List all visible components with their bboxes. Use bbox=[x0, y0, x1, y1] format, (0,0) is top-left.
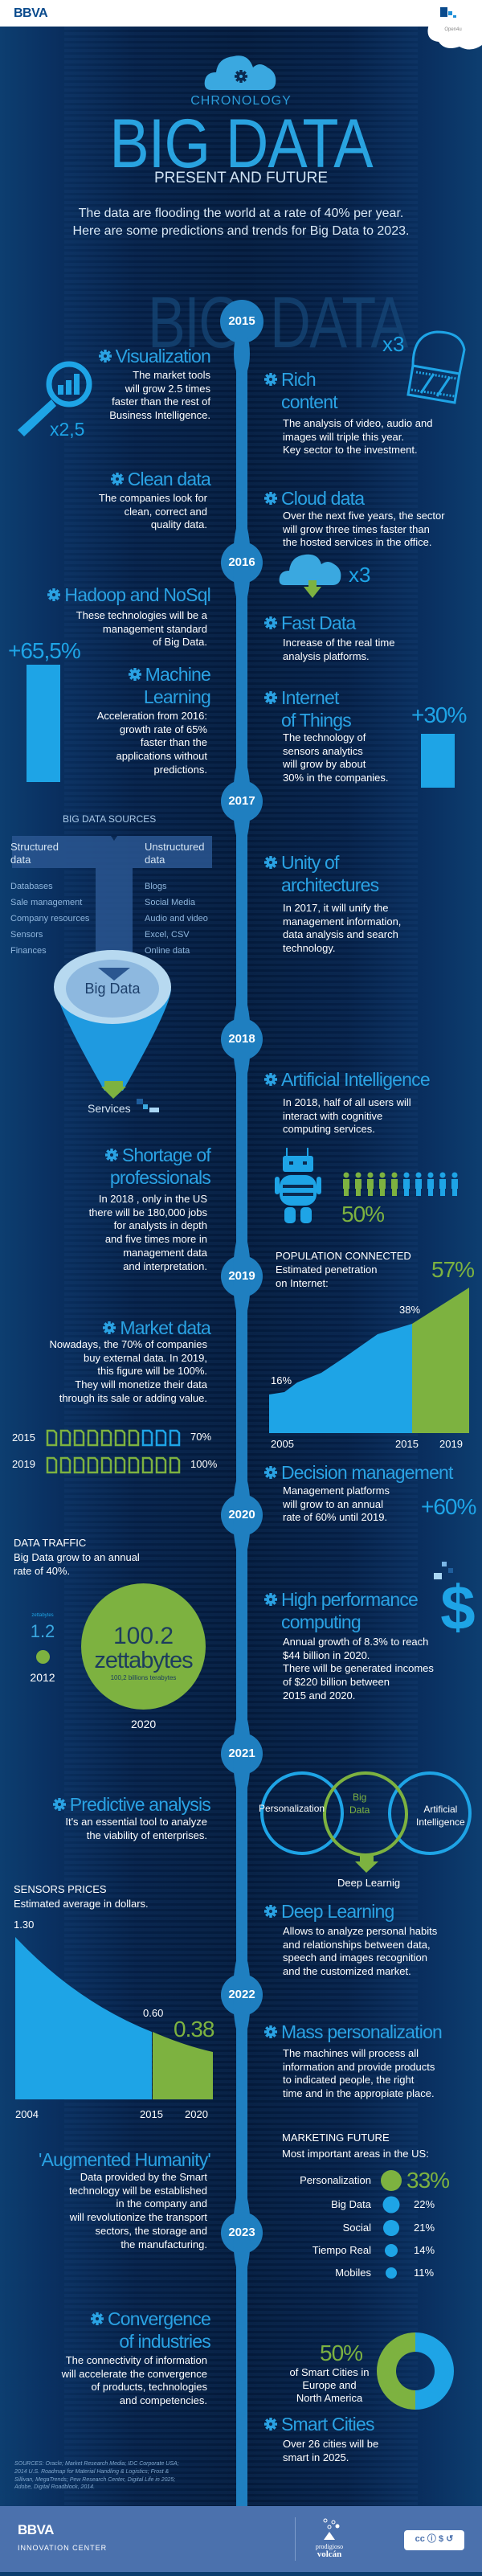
heading bbox=[263, 1588, 418, 1633]
heading: Shortage of bbox=[122, 1145, 210, 1165]
panel: predictive analysis bbox=[32, 1792, 214, 1842]
heading bbox=[90, 2308, 210, 2353]
venn diagram: personalization, big data, AI: Artificial bbox=[423, 1804, 457, 1815]
panel: cloud data bbox=[264, 488, 445, 548]
heading: DATA TRAFFIC bbox=[14, 1537, 86, 1549]
text: $44 billion in 2020. bbox=[283, 1649, 370, 1661]
list: structured: Sale management bbox=[10, 898, 82, 907]
text: quality data. bbox=[151, 518, 207, 530]
panel: fast data bbox=[264, 612, 394, 662]
text: The companies look for bbox=[99, 492, 207, 504]
year: 2015: 2015 bbox=[228, 314, 255, 328]
text: there will be 180,000 jobs bbox=[89, 1206, 207, 1218]
heading: Market data bbox=[120, 1317, 210, 1338]
text bbox=[62, 2354, 207, 2408]
bubble: 2012: 2012 bbox=[30, 1671, 55, 1684]
heading: Estimated penetration bbox=[276, 1263, 377, 1276]
text: will grow to an annual bbox=[283, 1498, 383, 1510]
text: buy external data. In 2019, bbox=[84, 1352, 207, 1364]
panel: deep learning bbox=[263, 1900, 472, 1979]
year: 2023: 2023 bbox=[228, 2226, 255, 2239]
heading: Artificial Intelligence bbox=[281, 1069, 430, 1090]
labels: 38% bbox=[399, 1304, 420, 1316]
bubble list bbox=[273, 2128, 458, 2283]
text bbox=[283, 2438, 378, 2464]
sources: Adobe, Digital Roadblock, 2014. bbox=[14, 2484, 95, 2490]
panel: smart cities bbox=[263, 2413, 424, 2466]
heading: Machine bbox=[145, 664, 210, 685]
text: management information, bbox=[283, 915, 401, 928]
text: applications without bbox=[116, 750, 207, 762]
text bbox=[283, 731, 389, 784]
year: 2020: 2020 bbox=[228, 1508, 255, 1521]
text: sectors, the storage and bbox=[96, 2225, 207, 2237]
text bbox=[96, 710, 207, 776]
icon: magnifier x2,5 bbox=[18, 362, 92, 440]
column: unstructured bbox=[145, 841, 204, 866]
footer logo: BBVA innovation center: BBVA bbox=[18, 2522, 54, 2537]
bar: +30% bbox=[411, 702, 466, 788]
intro text bbox=[73, 207, 409, 238]
donut: smart cities 50% bbox=[305, 2331, 458, 2411]
panel: augmented humanity bbox=[16, 2148, 214, 2254]
text: and relationships between data, bbox=[283, 1939, 431, 1951]
panel: mass personalization bbox=[263, 2021, 472, 2101]
panel: sensors prices chart: 0.38 bbox=[174, 2017, 214, 2042]
heading bbox=[264, 369, 337, 412]
bubble: 2020: zettabytes bbox=[94, 1648, 193, 1673]
panel: population connected chart: 2019 bbox=[439, 1438, 463, 1450]
heading: Fast Data bbox=[281, 612, 356, 633]
intro text: Here are some predictions and trends for Big Data to 2023. bbox=[73, 224, 409, 238]
heading: POPULATION CONNECTED bbox=[276, 1250, 411, 1262]
footer logo: creative commons: cc ⓘ $ ↺ bbox=[415, 2534, 453, 2544]
text: clean, correct and bbox=[125, 506, 207, 518]
year: 2019: 2019 bbox=[228, 1269, 255, 1283]
icon: cloud download x3 bbox=[280, 555, 370, 598]
text: Over the next five years, the sector bbox=[283, 510, 445, 522]
panel: big data sources funnel bbox=[10, 813, 212, 1115]
text: The connectivity of information bbox=[66, 2354, 207, 2366]
text: in the company and bbox=[116, 2197, 207, 2209]
text bbox=[65, 1816, 207, 1842]
panel: marketing future: 14% bbox=[414, 2244, 435, 2256]
heading: Estimated average in dollars. bbox=[14, 1898, 149, 1910]
text: Annual growth of 8.3% to reach bbox=[283, 1636, 428, 1648]
venn diagram: personalization, big data, AI: Intelligence bbox=[416, 1816, 465, 1828]
text bbox=[89, 1193, 207, 1273]
footer logo: prodigioso volcan: volcán bbox=[317, 2549, 341, 2559]
text: Key sector to the investment. bbox=[283, 444, 418, 456]
panel: sensors prices chart: 2015 bbox=[140, 2108, 163, 2120]
logo: Open4u cloud: Open4u bbox=[444, 27, 462, 32]
icon: cloud with gear bbox=[204, 55, 276, 90]
text: computing services. bbox=[283, 1123, 375, 1135]
heading: architectures bbox=[281, 874, 378, 895]
footer bbox=[0, 2506, 482, 2572]
text: The machines will process all bbox=[283, 2047, 419, 2059]
text bbox=[283, 1485, 390, 1525]
list: unstructured: Blogs bbox=[145, 882, 167, 891]
text: rate of 60% until 2019. bbox=[283, 1511, 387, 1523]
venn diagram: personalization, big data, AI: Data bbox=[349, 1804, 370, 1816]
text: the viability of enterprises. bbox=[87, 1829, 207, 1841]
text: technology. bbox=[283, 942, 336, 954]
text: will grow three times faster than bbox=[283, 523, 430, 535]
heading: Deep Learning bbox=[281, 1901, 394, 1922]
panel: marketing future: 33% bbox=[406, 2168, 449, 2193]
panel: population connected chart: 16% bbox=[271, 1374, 292, 1386]
heading: Big Data grow to an annual bbox=[14, 1551, 140, 1562]
text: technology will be established bbox=[69, 2185, 207, 2197]
panel: shortage of professionals bbox=[64, 1143, 214, 1273]
text: In 2017, it will unify the bbox=[283, 902, 389, 914]
icon chart: documents 70% / 100%: 70% bbox=[190, 1431, 211, 1443]
heading: professionals bbox=[110, 1167, 210, 1188]
heading: Clean data bbox=[128, 469, 210, 489]
column: structured: Structured bbox=[10, 841, 59, 853]
heading: Internet bbox=[281, 687, 339, 708]
panel: convergence of industries bbox=[56, 2307, 214, 2407]
icon: cloud download x3: x3 bbox=[349, 563, 370, 587]
footer logo: creative commons bbox=[404, 2530, 464, 2550]
panel: sensors prices chart: 2020 bbox=[185, 2108, 208, 2120]
text bbox=[283, 417, 432, 456]
venn diagram: personalization, big data, AI: Personalization bbox=[259, 1803, 325, 1814]
panel: sensors prices chart: 1.30 bbox=[14, 1919, 34, 1931]
text bbox=[283, 2047, 435, 2101]
heading: of industries bbox=[119, 2331, 210, 2352]
text: information and provide products bbox=[283, 2061, 435, 2073]
panel: artificial intelligence bbox=[263, 1068, 472, 1136]
footer logo: prodigioso volcan bbox=[305, 2516, 353, 2564]
text: and interpretation. bbox=[123, 1260, 207, 1272]
header bar bbox=[0, 0, 482, 27]
panel: high performance computing bbox=[263, 1559, 477, 1704]
heading: 'Augmented Humanity' bbox=[39, 2149, 210, 2170]
heading: Mass personalization bbox=[281, 2021, 442, 2042]
text: Increase of the real time bbox=[283, 637, 394, 649]
list: structured: Databases bbox=[10, 882, 53, 891]
panel: sensors prices chart: 0.60 bbox=[143, 2007, 163, 2019]
icon: film strip x3 bbox=[382, 331, 466, 404]
panel: rich content bbox=[264, 369, 432, 456]
text: management standard bbox=[103, 623, 207, 635]
text bbox=[76, 609, 207, 648]
text: data analysis and search bbox=[283, 928, 398, 940]
text: through its sale or adding value. bbox=[59, 1392, 207, 1404]
icon: robot and people 50%: 50% bbox=[341, 1202, 384, 1227]
list: unstructured: Social Media bbox=[145, 898, 195, 907]
bubble: 2012 bbox=[26, 1613, 59, 1693]
list: unstructured: Excel, CSV bbox=[145, 930, 190, 940]
panel: hadoop and nosql bbox=[47, 584, 210, 648]
text bbox=[283, 902, 401, 956]
label: services: Services bbox=[88, 1102, 131, 1115]
text: and competencies. bbox=[120, 2394, 207, 2406]
icon: robot and people 50% bbox=[275, 1148, 468, 1228]
text bbox=[283, 510, 445, 548]
heading: Smart Cities bbox=[281, 2414, 374, 2435]
label: +60%: +60% bbox=[421, 1494, 476, 1519]
venn diagram: personalization, big data, AI: Big bbox=[353, 1792, 366, 1803]
text: It's an essential tool to analyze bbox=[65, 1816, 207, 1828]
text: There will be generated incomes bbox=[283, 1662, 434, 1674]
text: The technology of bbox=[283, 731, 366, 743]
text: Data provided by the Smart bbox=[80, 2171, 207, 2183]
text: interact with cognitive bbox=[283, 1110, 382, 1122]
heading: Predictive analysis bbox=[70, 1794, 210, 1815]
footer logo: BBVA innovation center bbox=[18, 2522, 107, 2552]
text: faster than the bbox=[141, 736, 207, 748]
text bbox=[283, 1636, 434, 1703]
heading: Decision management bbox=[281, 1462, 453, 1483]
text: The market tools bbox=[133, 369, 210, 381]
logo: BBVA: BBVA bbox=[14, 6, 47, 20]
column: unstructured: data bbox=[145, 854, 165, 866]
list: structured bbox=[10, 882, 89, 956]
heading bbox=[129, 664, 210, 707]
bubble: 2012: 1.2 bbox=[31, 1621, 55, 1641]
text: analysis platforms. bbox=[283, 650, 370, 662]
text: Acceleration from 2016: bbox=[97, 710, 207, 722]
text: management data bbox=[123, 1247, 207, 1259]
heading bbox=[14, 1536, 140, 1579]
area chart bbox=[11, 1881, 220, 2120]
text: Nowadays, the 70% of companies bbox=[49, 1338, 207, 1350]
text: and five times more in bbox=[105, 1233, 207, 1245]
list: structured: Finances bbox=[10, 946, 47, 956]
year: 2018: 2018 bbox=[228, 1032, 255, 1046]
bubble: 2020: 100,2 billions terabytes bbox=[111, 1674, 176, 1681]
text: of $220 billion between bbox=[283, 1676, 390, 1688]
text: to indicated people, the right bbox=[283, 2074, 414, 2086]
text bbox=[109, 369, 210, 421]
icon chart: documents 70% / 100%: 100% bbox=[190, 1458, 217, 1470]
bubble: 2020: 100.2 bbox=[113, 1623, 174, 1649]
text bbox=[69, 2171, 207, 2251]
column: structured bbox=[10, 841, 59, 866]
label: 57%: 57% bbox=[431, 1257, 474, 1282]
text bbox=[283, 637, 394, 662]
panel: unity of architectures bbox=[264, 852, 401, 954]
panel: data traffic: 2020 bbox=[131, 1718, 156, 1730]
text: predictions. bbox=[154, 764, 207, 776]
panel: decision management bbox=[263, 1461, 477, 1526]
panel: marketing future: 22% bbox=[414, 2198, 435, 2210]
heading: of Things bbox=[281, 710, 351, 731]
text: this figure will be 100%. bbox=[97, 1365, 207, 1377]
heading: Cloud data bbox=[281, 488, 364, 509]
heading: Unity of bbox=[281, 852, 339, 873]
label: big data: Big Data bbox=[84, 981, 141, 997]
panel: market data bbox=[24, 1316, 214, 1406]
heading: Hadoop and NoSql bbox=[64, 584, 210, 605]
text bbox=[283, 1096, 411, 1136]
panel: population connected chart: 2005 bbox=[271, 1438, 294, 1450]
heading bbox=[282, 2130, 429, 2162]
text: for analysts in depth bbox=[114, 1219, 207, 1231]
bar: +65,5%: +65,5% bbox=[8, 638, 80, 663]
text bbox=[49, 1338, 207, 1406]
heading: Most important areas in the US: bbox=[282, 2148, 429, 2160]
heading: rate of 40%. bbox=[14, 1565, 70, 1577]
bar: +30%: +30% bbox=[411, 702, 466, 727]
icon: film strip x3: x3 bbox=[382, 332, 404, 356]
subtitle: chronology: CHRONOLOGY bbox=[190, 94, 292, 108]
panel: marketing future bbox=[273, 2128, 458, 2283]
panel: marketing future: 21% bbox=[414, 2222, 435, 2234]
heading: Learning bbox=[144, 686, 210, 707]
venn diagram: personalization, big data, AI: Deep Learnig bbox=[337, 1877, 400, 1889]
text: the hosted services in the office. bbox=[283, 536, 431, 548]
text: will accelerate the convergence bbox=[62, 2368, 207, 2380]
text: They will monetize their data bbox=[75, 1378, 207, 1390]
text: smart in 2025. bbox=[283, 2451, 349, 2463]
text: speech and images recognition bbox=[283, 1951, 427, 1964]
list: structured: Company resources bbox=[10, 914, 89, 924]
panel: marketing future: Tiempo Real bbox=[312, 2244, 371, 2256]
funnel graphic bbox=[12, 836, 212, 1112]
sources: Sillivan, MegaTrends; Pew Research Center, Digital Life in 2025; bbox=[14, 2477, 175, 2483]
heading: Convergence bbox=[108, 2308, 210, 2329]
panel: sensors prices chart: 2004 bbox=[15, 2108, 39, 2120]
sources bbox=[14, 2460, 215, 2492]
panel: machine learning bbox=[96, 664, 210, 776]
text: faster than the rest of bbox=[112, 395, 210, 407]
year: 2017: 2017 bbox=[228, 794, 255, 808]
text: Business Intelligence. bbox=[109, 409, 210, 421]
donut: smart cities 50%: North America bbox=[296, 2392, 362, 2404]
list: structured: Sensors bbox=[10, 930, 43, 940]
subtitle: present and future: PRESENT AND FUTURE bbox=[154, 170, 328, 186]
bubble: 2012: zettabytes bbox=[31, 1613, 54, 1618]
icon: magnifier x2,5: x2,5 bbox=[50, 419, 84, 440]
text: growth rate of 65% bbox=[120, 723, 207, 735]
sources: SOURCES: Oracle; Market Research Media; IDC Corporate USA; bbox=[14, 2461, 179, 2467]
text: images will triple this year. bbox=[283, 431, 404, 443]
venn diagram: personalization, big data, AI bbox=[257, 1768, 476, 1890]
footer logo: prodigioso volcan: prodigioso bbox=[316, 2543, 343, 2550]
panel: marketing future: Personalization bbox=[300, 2174, 371, 2186]
text: In 2018 , only in the US bbox=[99, 1193, 207, 1205]
heading: BIG DATA SOURCES bbox=[63, 813, 156, 825]
panel: marketing future: Social bbox=[343, 2222, 371, 2234]
text: will grow by about bbox=[283, 758, 366, 770]
heading bbox=[264, 687, 351, 731]
heading: High performance bbox=[281, 1589, 418, 1610]
panel: population connected chart: 2015 bbox=[395, 1438, 419, 1450]
panel: marketing future: Mobiles bbox=[335, 2267, 371, 2279]
panel: marketing future: Big Data bbox=[331, 2198, 371, 2210]
text: sensors analytics bbox=[283, 745, 363, 757]
text: 30% in the companies. bbox=[283, 772, 389, 784]
text: and the customized market. bbox=[283, 1965, 411, 1977]
faded background BIG DATA: BIG DATA bbox=[148, 283, 407, 363]
panel: population connected chart bbox=[268, 1247, 476, 1452]
icon chart: documents 70% / 100%: 2015 bbox=[12, 1431, 35, 1444]
area chart bbox=[268, 1247, 476, 1452]
text: of products, technologies bbox=[91, 2381, 207, 2393]
donut: smart cities 50%: Europe and bbox=[302, 2379, 357, 2391]
text: of Big Data. bbox=[153, 636, 207, 648]
year: 2022: 2022 bbox=[228, 1988, 255, 2001]
heading: MARKETING FUTURE bbox=[282, 2132, 390, 2144]
icon chart: documents 70% / 100% bbox=[11, 1427, 220, 1474]
heading: Visualization bbox=[116, 346, 210, 367]
text: Allows to analyze personal habits bbox=[283, 1925, 437, 1937]
heading: on Internet: bbox=[276, 1277, 329, 1289]
heading bbox=[276, 1249, 411, 1290]
heading bbox=[14, 1882, 149, 1911]
text bbox=[283, 1925, 437, 1979]
panel: clean data bbox=[99, 469, 211, 530]
text: will revolutionize the transport bbox=[70, 2211, 207, 2223]
year: 2021: 2021 bbox=[228, 1747, 255, 1760]
text: time and in the appropiate place. bbox=[283, 2087, 435, 2099]
text: will grow 2.5 times bbox=[125, 383, 210, 395]
text: Over 26 cities will be bbox=[283, 2438, 378, 2450]
icon chart: documents 70% / 100%: 2019 bbox=[12, 1458, 35, 1470]
heading: computing bbox=[281, 1612, 361, 1632]
text: Management platforms bbox=[283, 1485, 390, 1497]
panel: data traffic bbox=[10, 1536, 219, 1733]
panel: sensors prices chart bbox=[11, 1881, 220, 2120]
title block bbox=[109, 94, 373, 186]
heading bbox=[104, 1144, 210, 1189]
list: unstructured: Audio and video bbox=[145, 914, 208, 924]
heading: SENSORS PRICES bbox=[14, 1883, 107, 1895]
text: In 2018, half of all users will bbox=[283, 1096, 411, 1108]
heading: content bbox=[281, 391, 337, 412]
column: structured: data bbox=[10, 854, 31, 866]
panel: visualization bbox=[99, 346, 210, 421]
list: unstructured bbox=[145, 882, 208, 956]
bubble: 2020 bbox=[81, 1583, 206, 1710]
panel: marketing future: 11% bbox=[414, 2267, 434, 2279]
text: 2015 and 2020. bbox=[283, 1689, 355, 1702]
panel: internet of things bbox=[264, 687, 389, 784]
text: The analysis of video, audio and bbox=[283, 417, 432, 429]
intro text: The data are flooding the world at a rate of 40% per year. bbox=[79, 207, 403, 220]
donut: smart cities 50%: 50% bbox=[320, 2341, 362, 2365]
bar: +65,5% bbox=[8, 638, 80, 782]
sources: 2014 U.S. Roadmap for Material Handling & Logistics; Frost & bbox=[14, 2469, 169, 2475]
year: 2016: 2016 bbox=[228, 555, 255, 569]
heading bbox=[263, 851, 378, 896]
text: These technologies will be a bbox=[76, 609, 207, 621]
footer logo: BBVA innovation center: INNOVATION CENTER bbox=[18, 2544, 107, 2552]
text bbox=[99, 492, 207, 530]
text: the manufacturing. bbox=[120, 2238, 207, 2250]
list: unstructured: Online data bbox=[145, 946, 190, 956]
logo: Open4u cloud bbox=[427, 7, 482, 50]
main title: BIG DATA: BIG DATA bbox=[109, 105, 373, 182]
heading: Rich bbox=[281, 369, 316, 390]
column: unstructured: Unstructured bbox=[145, 841, 204, 853]
donut: smart cities 50%: of Smart Cities in bbox=[289, 2366, 369, 2378]
